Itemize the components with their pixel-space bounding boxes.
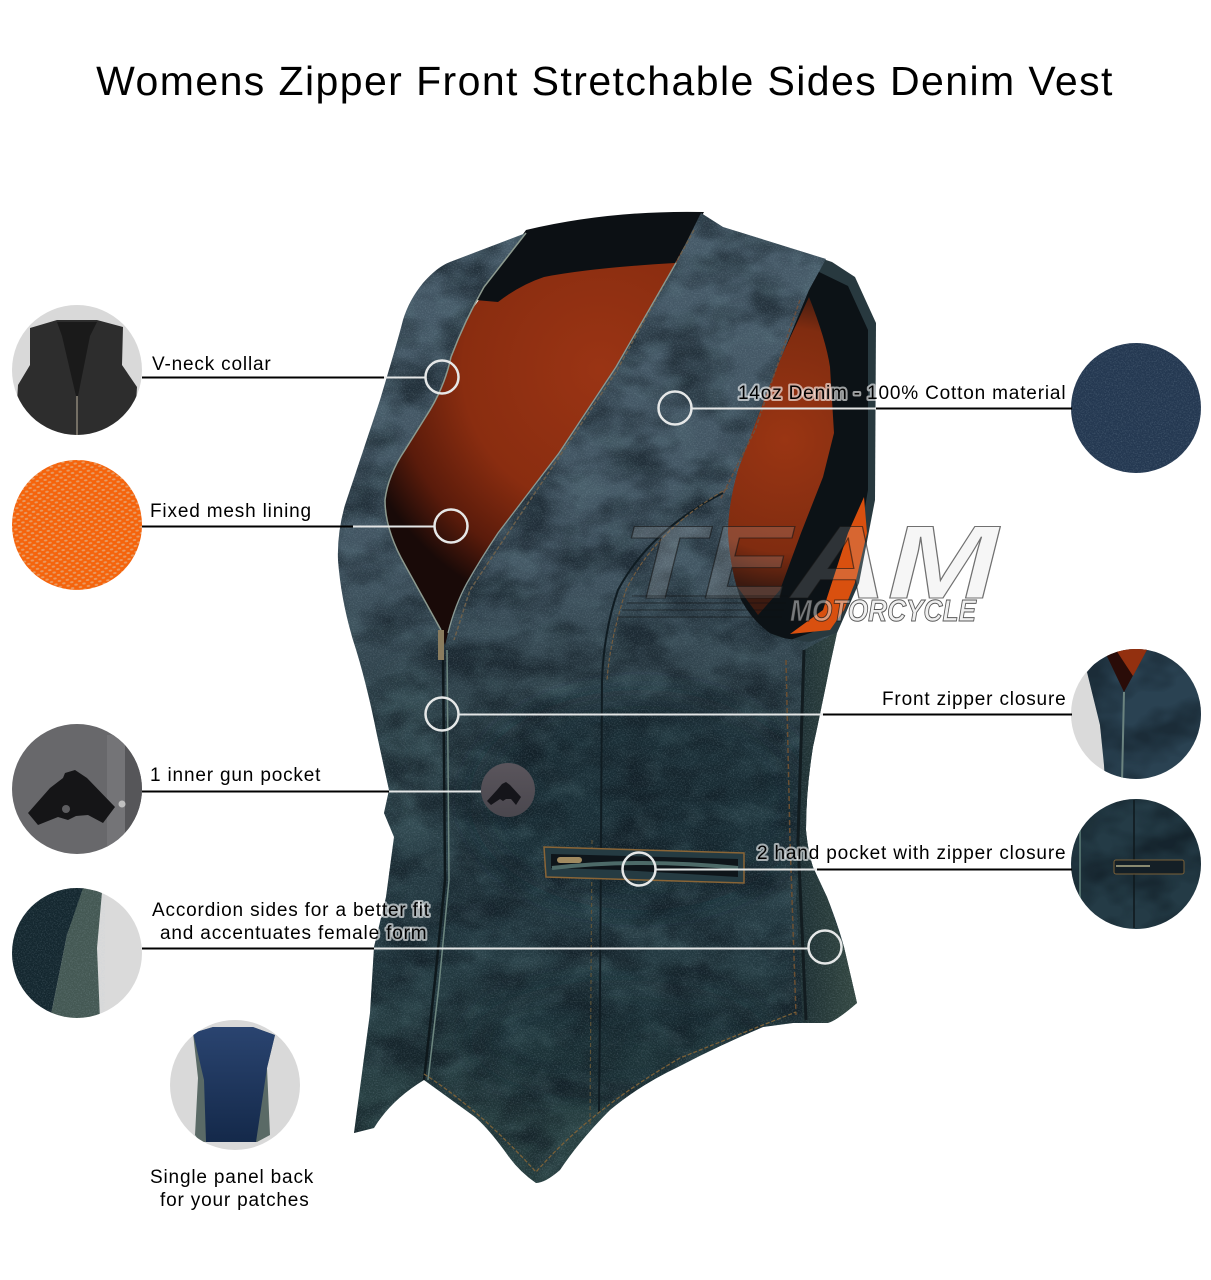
callout: V-neck collar: V-neck collar [152, 354, 272, 375]
callout: gun pocket: 1 inner gun pocket [150, 765, 321, 786]
callout: hand pocket: 2 hand pocket with zipper closure [757, 843, 1066, 864]
bright orange side lining [790, 497, 867, 634]
waist shading [470, 690, 810, 910]
callout: denim material [658, 343, 1201, 473]
hand pocket [544, 847, 744, 883]
callout: front zipper: Front zipper closure [882, 689, 1067, 710]
seams and zipper [385, 230, 806, 1172]
callout: Fixed mesh lining [12, 460, 468, 590]
callout: denim material: 14oz Denim - 100% Cotton material [738, 383, 1066, 404]
title: Womens Zipper Front Stretchable Sides Denim Vest [96, 58, 1114, 104]
callout: gun pocket [12, 724, 481, 854]
orange lining inside armhole [725, 297, 834, 615]
callout: Fixed mesh lining: Fixed mesh lining [150, 501, 312, 522]
callout: front zipper [426, 648, 1202, 784]
callout: V-neck collar [12, 305, 458, 436]
callout: accordion sides [5, 885, 842, 1020]
callout: accordion sides: Accordion sides for a better fit [152, 900, 430, 921]
accordion stretch side [796, 630, 860, 1025]
callout: single panel back: for your patches [160, 1190, 310, 1211]
watermark: TEAM [622, 505, 1001, 621]
callout: single panel back: Single panel back [150, 1167, 314, 1188]
product photo: denim vest [330, 205, 1001, 1190]
watermark: MOTORCYCLE [790, 593, 977, 628]
orange neck lining [370, 250, 700, 660]
armhole rim and black interior [720, 258, 876, 650]
icon: gun pocket marker [481, 763, 535, 817]
denim body panels [330, 205, 870, 1190]
black neck interior [475, 212, 704, 302]
callout: accordion sides: and accentuates female form [160, 923, 427, 944]
callout: single panel back [150, 1020, 314, 1211]
callout: hand pocket [622, 799, 1201, 929]
